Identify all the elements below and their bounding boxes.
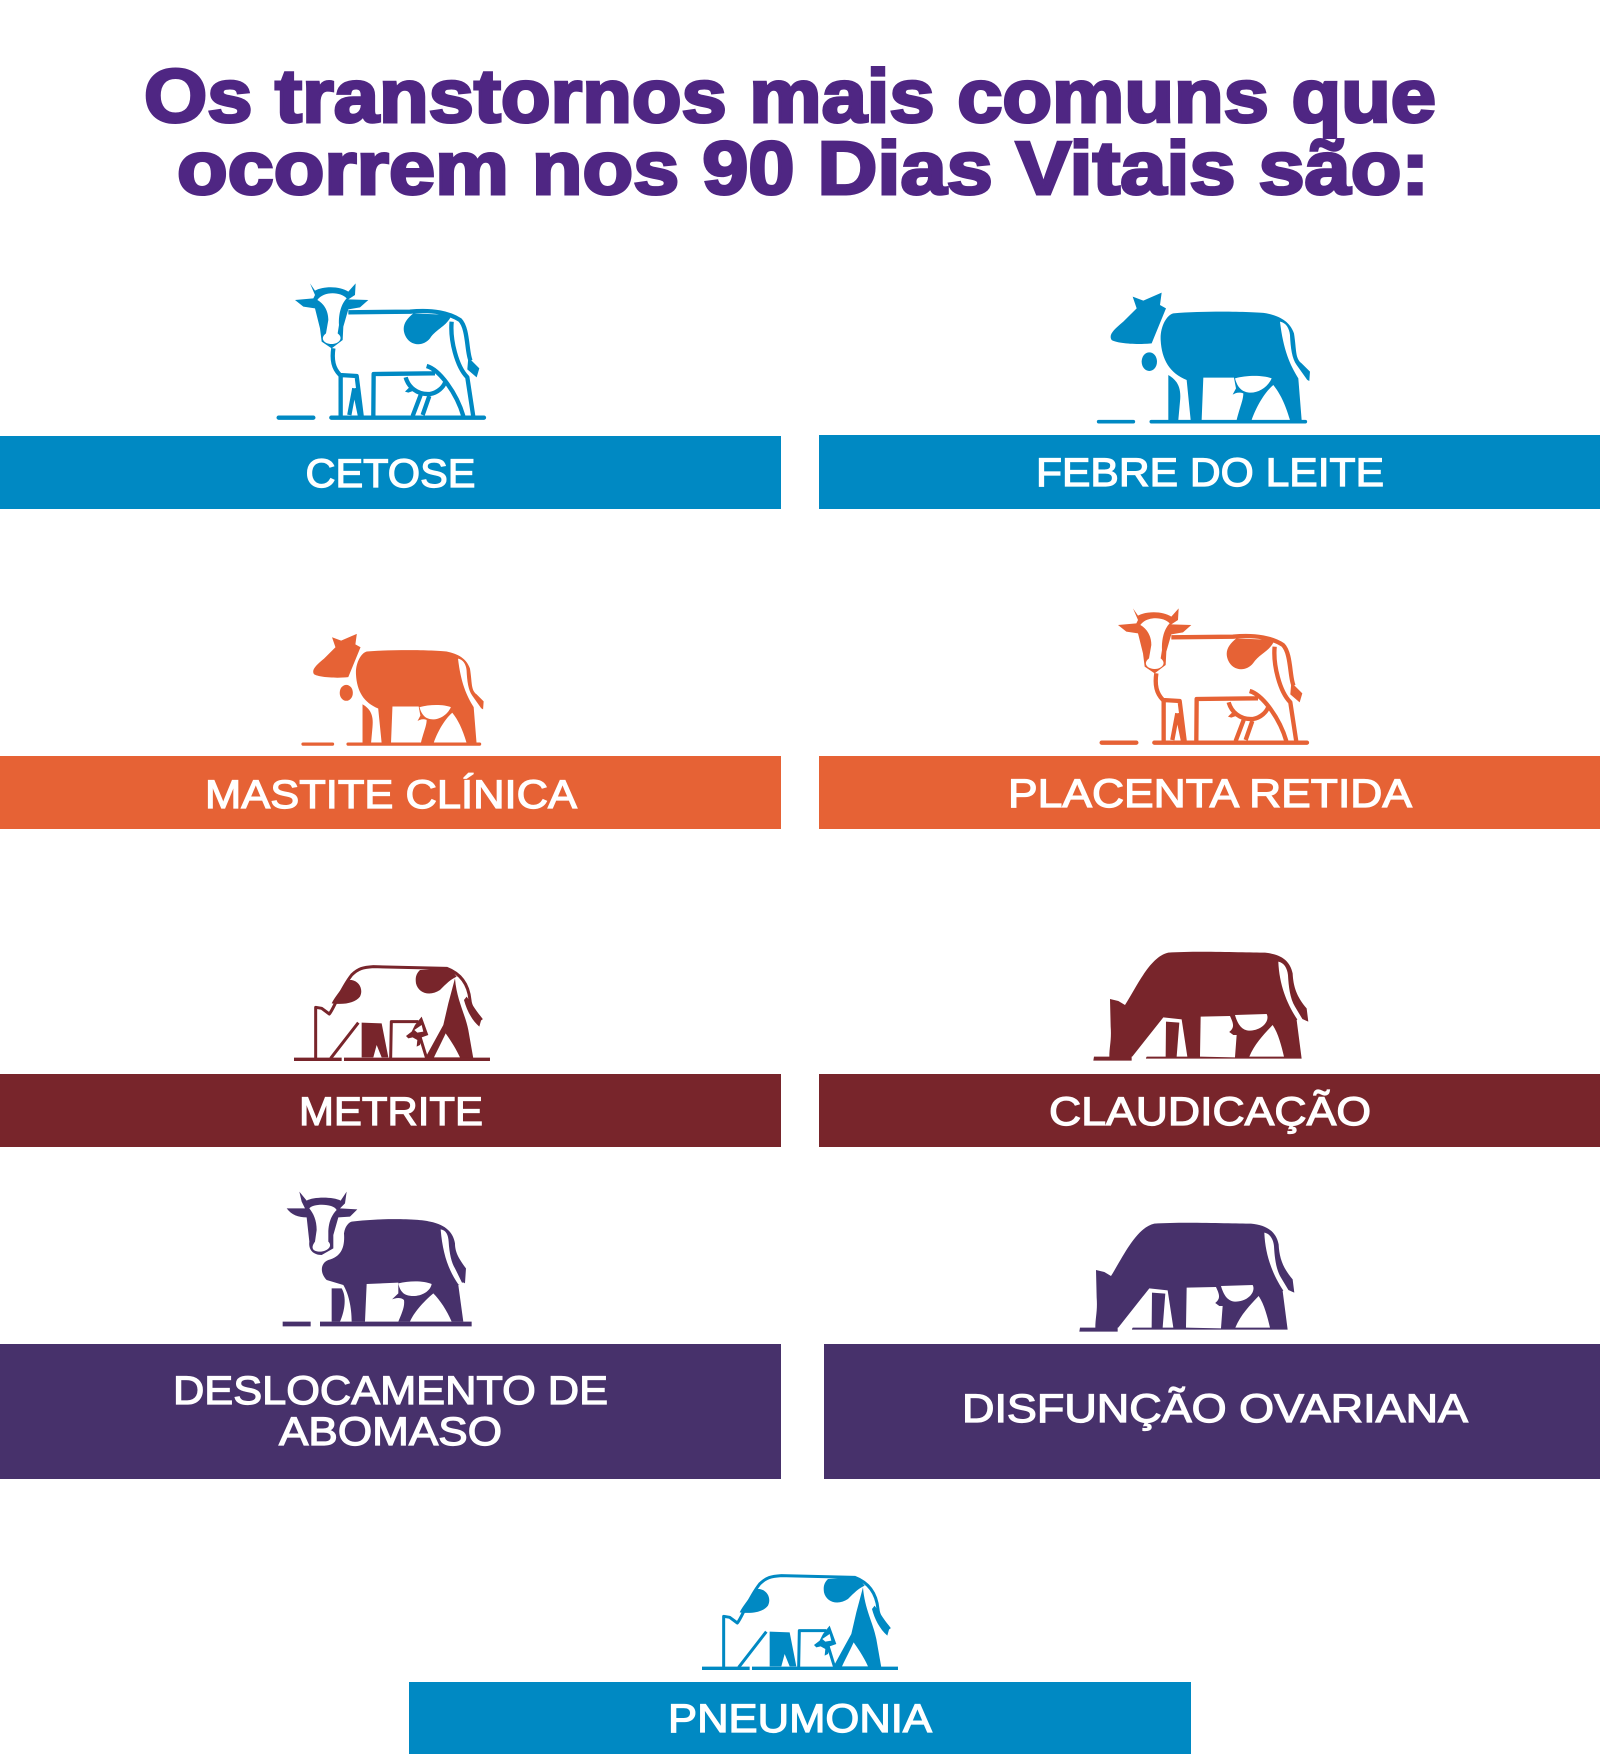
label bar: disfuncao ovariana [824, 1344, 1600, 1479]
label bar: cetose: CETOSE [306, 452, 476, 496]
panel: deslocamento de abomaso [0, 1192, 781, 1479]
label bar: pneumonia [409, 1682, 1191, 1754]
icon: solid cow orange [303, 634, 484, 744]
panel: cetose [0, 283, 781, 509]
label bar: placenta retida [819, 756, 1600, 829]
panel: disfuncao ovariana [824, 1223, 1600, 1479]
label bar: febre do leite [819, 435, 1600, 509]
panel: mastite clinica [0, 634, 781, 829]
icon: grazing cow outline blue [702, 1576, 898, 1668]
label bar: deslocamento de abomaso: DESLOCAMENTO DE [173, 1369, 608, 1413]
icon: front-facing solid cow purple [283, 1192, 472, 1324]
label bar: metrite [0, 1074, 781, 1147]
title: ocorrem nos 90 Dias Vitais são: [177, 126, 1429, 210]
title [144, 54, 1436, 210]
icon: standing cow outline blue [279, 283, 484, 418]
label bar: metrite: METRITE [299, 1090, 483, 1134]
label bar: cetose [0, 436, 781, 509]
panel: febre do leite [819, 293, 1600, 509]
label bar: deslocamento de abomaso [0, 1344, 781, 1479]
label bar: deslocamento de abomaso: ABOMASO [279, 1410, 502, 1454]
label bar: placenta retida: PLACENTA RETIDA [1008, 772, 1412, 816]
panel: pneumonia [409, 1576, 1191, 1754]
panel: claudicacao [819, 952, 1600, 1147]
icon: grazing solid cow purple [1079, 1223, 1294, 1332]
label bar: claudicacao: CLAUDICAÇÃO [1049, 1089, 1371, 1134]
icon: solid cow blue [1099, 293, 1310, 422]
title: Os transtornos mais comuns que [144, 54, 1436, 138]
label bar: mastite clinica: MASTITE CLÍNICA [205, 772, 577, 817]
icon: standing cow outline orange [1102, 608, 1307, 743]
label bar: mastite clinica [0, 756, 781, 829]
label bar: claudicacao [819, 1074, 1600, 1147]
label bar: disfuncao ovariana: DISFUNÇÃO OVARIANA [962, 1386, 1468, 1431]
panel: metrite [0, 967, 781, 1147]
icon: grazing cow outline maroon [294, 967, 490, 1059]
panel: placenta retida [819, 608, 1600, 829]
label bar: pneumonia: PNEUMONIA [668, 1697, 932, 1741]
icon: grazing solid cow maroon [1093, 952, 1308, 1061]
label bar: febre do leite: FEBRE DO LEITE [1036, 451, 1384, 495]
